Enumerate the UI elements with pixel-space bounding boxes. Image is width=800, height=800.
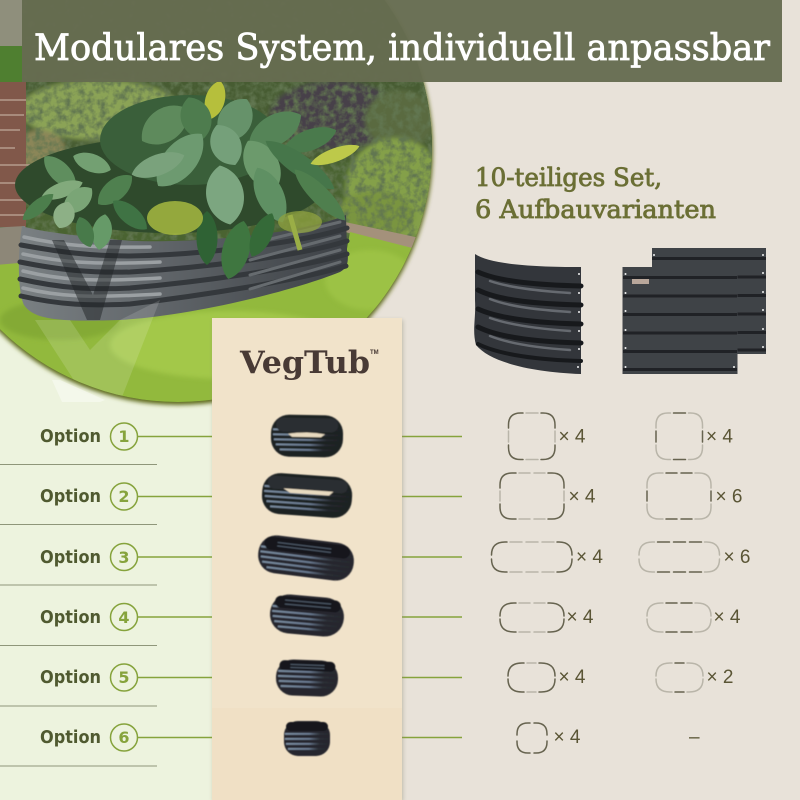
tub: option 3: [256, 533, 356, 583]
watermark: lower V on green: [52, 380, 105, 402]
diagram: row 2 column 1: × 4: [568, 486, 596, 508]
foliage: hosta leaves: [15, 78, 362, 282]
diagram: row 6 column 1: [517, 723, 581, 753]
texture: foliage mottling: [26, 82, 432, 240]
logo: VegTub: VegTub: [239, 345, 370, 381]
diagram: row 3 column 1: [492, 542, 603, 572]
option 2: [40, 483, 138, 510]
dash: row 6 column 2: –: [689, 727, 700, 748]
option 2: 2: [118, 487, 130, 506]
watermark: V shape: [35, 240, 160, 402]
wood panel: [212, 318, 403, 800]
diagram: row 5 column 1: × 4: [558, 667, 586, 688]
brick wall: [0, 82, 26, 227]
option 3: 3: [118, 548, 130, 567]
option 1: [40, 423, 138, 450]
option 1: Option: [40, 427, 101, 447]
diagram: row 1 column 1: × 4: [558, 426, 586, 448]
product: curved panel: [474, 254, 581, 374]
heading: set description: 6 Aufbauvarianten: [475, 195, 716, 224]
option 4: 4: [118, 608, 130, 627]
title: Modulares System, individuell anpassbar: [34, 28, 771, 69]
diagram: row 5 column 2: [656, 663, 733, 692]
option 5: 5: [118, 668, 130, 687]
tub: option 2: [261, 472, 353, 519]
tub: option 4: [268, 593, 346, 638]
diagram: row 4 column 2: [647, 603, 741, 632]
diagrams: column 1: [492, 413, 603, 753]
option 6: [40, 724, 138, 751]
ivy: top left corner: [0, 0, 22, 46]
diagram: row 2 column 2: [647, 473, 742, 519]
diagram: row 2 column 2: × 6: [716, 486, 742, 508]
diagram: row 4 column 1: × 4: [566, 607, 594, 628]
diagram: row 5 column 2: × 2: [706, 667, 733, 688]
diagram: row 1 column 1: [508, 413, 586, 460]
option 6: 6: [118, 728, 130, 747]
diagram: row 5 column 1: [508, 663, 586, 692]
background: green left side: [0, 300, 215, 800]
option 5: Option: [40, 668, 101, 688]
logo: VegTub: TM: [370, 350, 379, 356]
tub: option 5: [275, 659, 339, 697]
option 5: [40, 664, 138, 691]
diagram: row 3 column 2: [639, 542, 750, 572]
photo: raised bed in garden: [0, 0, 470, 420]
background: beige right side: [215, 0, 800, 800]
diagram: row 1 column 2: [656, 413, 733, 460]
tub: option 6: [284, 721, 330, 756]
heading: set description: 10-teiliges Set,: [475, 163, 662, 192]
option 3: Option: [40, 548, 101, 568]
heading: set description: [475, 163, 716, 224]
title banner: [22, 0, 782, 82]
option 1: 1: [118, 427, 130, 446]
product: flat panels: [622, 248, 766, 374]
tub: option 1: [271, 414, 343, 458]
diagram: row 4 column 2: × 4: [714, 607, 741, 628]
lawn: [0, 232, 412, 402]
diagram: row 1 column 2: × 4: [706, 426, 733, 448]
option 4: Option: [40, 608, 101, 628]
diagram: row 4 column 1: [500, 603, 594, 632]
option 4: [40, 604, 138, 630]
metal bed body: [19, 215, 348, 321]
connector lines: right: [402, 436, 462, 738]
diagram: row 6 column 1: × 4: [554, 727, 581, 748]
diagrams: column 2: [639, 413, 750, 748]
diagram: row 3 column 1: × 4: [576, 547, 603, 568]
paved path: [0, 226, 25, 265]
option 2: Option: [40, 487, 101, 507]
option list: left labels: [0, 423, 212, 766]
diagram: row 2 column 1: [500, 473, 596, 519]
option 3: [40, 544, 138, 570]
option 6: Option: [40, 728, 101, 748]
diagram: row 3 column 2: × 6: [724, 547, 750, 568]
